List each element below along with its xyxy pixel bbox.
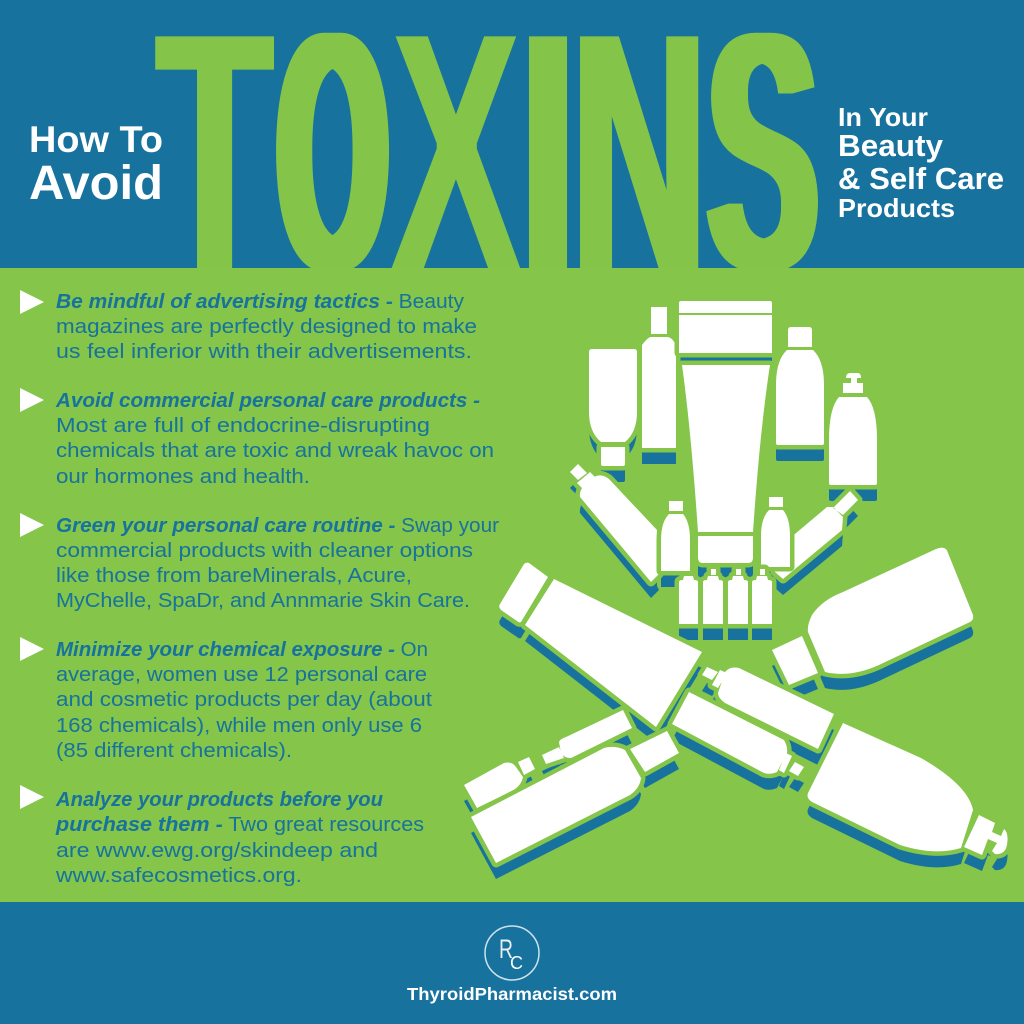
tip 1: advertising tactics: us feel inferior with their advertisements. bbox=[56, 340, 472, 363]
icon: large central tube bbox=[679, 301, 772, 563]
tip 3: green routine: MyChelle, SpaDr, and Annmarie Skin Care. bbox=[56, 589, 470, 612]
tip 5: analyze products: www.safecosmetics.org. bbox=[55, 864, 302, 887]
tip 5: analyze products bbox=[20, 785, 424, 887]
icon: tilted tube, right bbox=[770, 491, 858, 579]
tip 2: commercial products: chemicals that are toxic and wreak havoc on bbox=[56, 439, 494, 462]
tip 5: analyze products: Analyze your products before you bbox=[55, 788, 383, 811]
icon: tall bottle bbox=[642, 307, 676, 448]
icon: crossbone, slim bottle bbox=[542, 710, 632, 764]
tip 4: chemical exposure bbox=[20, 637, 432, 762]
tip 5: analyze products: purchase them - Two great resources bbox=[55, 813, 424, 836]
icon: crossbone, small left bottle bbox=[464, 757, 535, 808]
illustration: skull and crossbones made of bottles bbox=[464, 301, 1008, 879]
tip 3: green routine: like those from bareMinerals, Acure, bbox=[56, 564, 412, 587]
logo: RC circle bbox=[485, 926, 539, 980]
tip 3: green routine: Green your personal care routine - Swap your bbox=[56, 514, 499, 537]
footer: website: ThyroidPharmacist.com bbox=[407, 984, 617, 1004]
icon: small bottle, right bbox=[761, 497, 790, 567]
icon: four spray cans bbox=[679, 569, 772, 624]
tip 2: commercial products: Avoid commercial personal care products - bbox=[55, 389, 480, 412]
tip 2: commercial products: our hormones and health. bbox=[56, 465, 310, 488]
heading: How To Avoid: Avoid bbox=[29, 157, 163, 210]
icon: inverted bottle, top left bbox=[589, 349, 637, 466]
icon: pump bottle bbox=[829, 373, 877, 485]
heading: How To Avoid bbox=[29, 119, 163, 210]
tip 2: commercial products bbox=[20, 388, 494, 488]
heading: In Your Beauty & Self Care Products: & Self Care bbox=[838, 161, 1004, 196]
tip 3: green routine: commercial products with cleaner options bbox=[56, 539, 473, 562]
footer band bbox=[0, 902, 1024, 1024]
tip 1: advertising tactics: magazines are perfectly designed to make bbox=[56, 315, 477, 338]
tip 4: chemical exposure: and cosmetic products per day (about bbox=[56, 688, 432, 711]
heading: In Your Beauty & Self Care Products: In Your bbox=[838, 102, 928, 132]
icon: small bottle, left bbox=[661, 501, 690, 571]
header band bbox=[0, 0, 1024, 270]
icon: crossbone, large pump bottle bbox=[808, 723, 1008, 855]
icon: crossbone, mid bottle bbox=[672, 692, 804, 776]
heading: In Your Beauty & Self Care Products bbox=[838, 102, 1004, 223]
tip 3: green routine bbox=[20, 513, 499, 612]
heading: In Your Beauty & Self Care Products: Beauty bbox=[838, 128, 944, 163]
icon: crossbone, slim bottle right bbox=[702, 667, 834, 749]
logo: RC circle: R bbox=[499, 934, 513, 964]
tip 4: chemical exposure: (85 different chemicals). bbox=[56, 739, 292, 762]
tip 1: advertising tactics: Be mindful of advertising tactics - Beauty bbox=[56, 290, 465, 313]
tip 4: chemical exposure: Minimize your chemical exposure - On bbox=[56, 638, 428, 661]
tip 5: analyze products: are www.ewg.org/skindeep and bbox=[56, 839, 378, 862]
heading: In Your Beauty & Self Care Products: Products bbox=[838, 193, 955, 223]
heading: How To Avoid: How To bbox=[29, 119, 163, 160]
icon: crossbone, large upper-left tube bbox=[499, 563, 702, 727]
logo: RC circle: C bbox=[510, 953, 523, 973]
icon: crossbone, upper-right bottle bbox=[772, 548, 973, 685]
tip 4: chemical exposure: average, women use 12 personal care bbox=[56, 663, 427, 686]
icon: bottle, top right bbox=[776, 327, 824, 445]
icon: tilted tube, left bbox=[570, 464, 659, 582]
tip 1: advertising tactics bbox=[20, 290, 477, 363]
icon: crossbone, large lower-left bottle bbox=[471, 731, 679, 863]
green main panel bbox=[0, 268, 1024, 902]
tip 2: commercial products: Most are full of endocrine-disrupting bbox=[56, 414, 430, 437]
title: TOXINS bbox=[157, 0, 817, 345]
tip 4: chemical exposure: 168 chemicals), while men only use 6 bbox=[56, 714, 422, 737]
